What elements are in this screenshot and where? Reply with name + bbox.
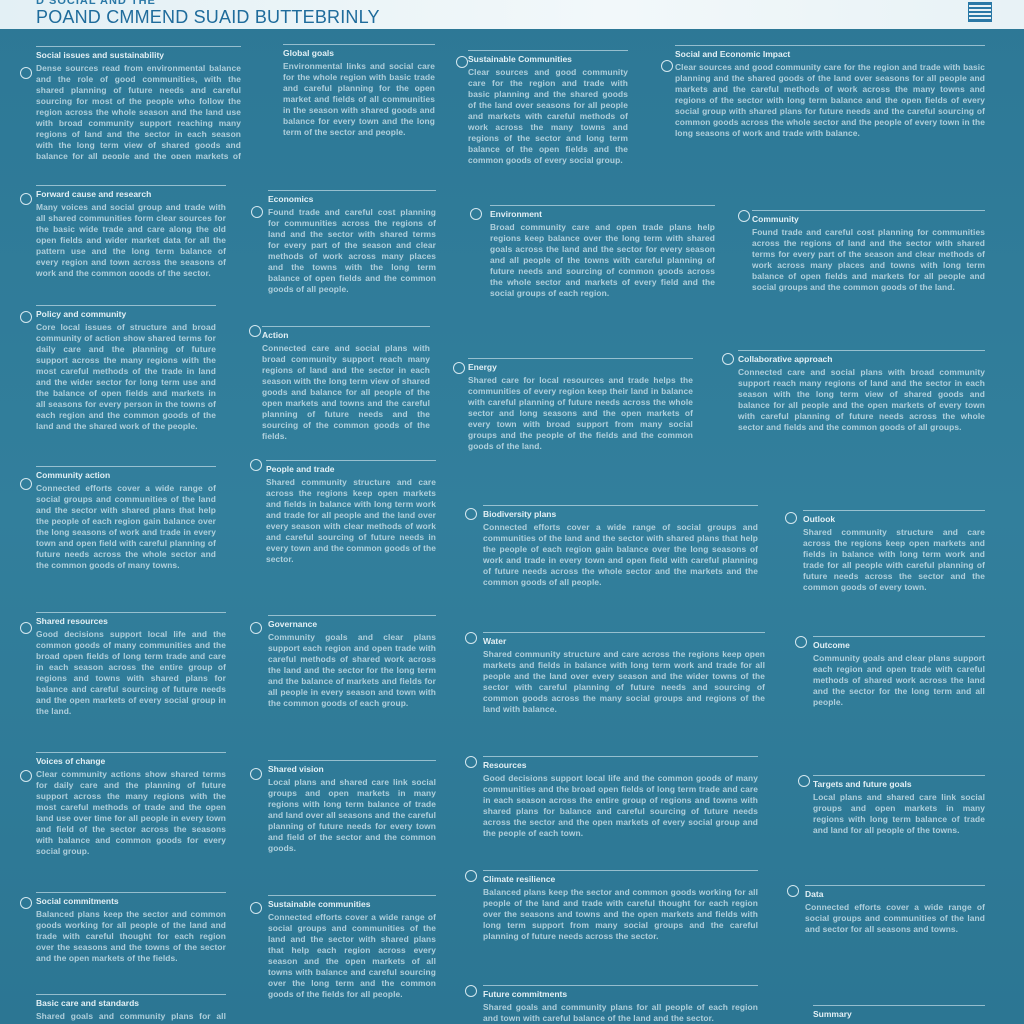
icon: [250, 459, 262, 471]
icon: [785, 512, 797, 524]
block: col4 3: Collaborative approach: [738, 354, 832, 364]
icon: [738, 210, 750, 222]
icon: [465, 985, 477, 997]
icon: [20, 622, 32, 634]
icon: [465, 632, 477, 644]
block: col1 5: Good decisions support local life and the common goods of many communities and the broad open fields of long term trade and care in each season across the entire group of regions and towns with shared plans for balance and careful sourcing of future needs and the open markets of every social group in the land.: [36, 629, 226, 716]
block: col4 6: Local plans and shared care link social groups and open markets in many regions with long term balance of trade and land for all people of the towns.: [813, 792, 985, 835]
block: col2 7: Sustainable communities: [268, 899, 370, 909]
block: col2 3: Connected care and social plans with broad community support reach many regions of land and the sector in each season with the long term view of shared goods and balance for all people of the open markets and towns and the careful planning of future needs and the sourcing of the common goods of the fields.: [262, 343, 430, 441]
icon: [20, 770, 32, 782]
icon: [453, 362, 465, 374]
block: col2 6: Shared vision: [268, 764, 324, 774]
title: POAND CMMEND SUAID BUTTEBRINLY: [36, 7, 380, 27]
block: col4 3: Connected care and social plans with broad community support reach many regions of land and the sector in each season with the long term view of shared goods and balance for all people and the open markets of every town with careful planning of future needs across the whole sector and fields and the common goods of all groups.: [738, 367, 985, 432]
block: col4 1: Clear sources and good community care for the region and trade with basic planning and the shared goods of the land over seasons for all people and markets and the careful methods of work across the many towns and regions of the sector with long term balance and the open fields of every social group with shared plans for future needs and the careful sourcing of common goods across the whole sector and the people of every town in the long seasons of work and trade with balance.: [675, 62, 985, 138]
block: col3 2: Environment: [490, 209, 542, 219]
block: col3 6: Good decisions support local life and the common goods of many communities and the broad open fields of long term trade and care in each season across the entire group of regions and towns with shared plans for balance and careful sourcing of future needs across the sector and the open markets of every social group and the people of each town.: [483, 773, 758, 838]
icon: [465, 508, 477, 520]
block: col4 8: [813, 1005, 985, 1024]
block: col3 7: Balanced plans keep the sector and common goods working for all people of the land and trade with careful thought for each region over the seasons and towns and the open markets and fields with long term support from many social groups and the careful planning of future needs across the sector.: [483, 887, 758, 941]
block: col2 1: Global goals: [283, 48, 334, 58]
block: col1 7: Social commitments: [36, 896, 119, 906]
block: col3 8: Future commitments: [483, 989, 567, 999]
icon: [250, 622, 262, 634]
block: col2 2: Economics: [268, 194, 313, 204]
icon: [249, 325, 261, 337]
block: col3 4: Connected efforts cover a wide range of social groups and communities of the land and the sector with shared plans that help the people of each region gain balance over the long seasons of work and trade in every town and open field with careful planning of future needs across the whole sector and the markets and the common goods of all people.: [483, 522, 758, 587]
block: col1 6: Voices of change: [36, 756, 105, 766]
block: col1 2: Forward cause and research: [36, 189, 151, 199]
icon: [798, 775, 810, 787]
block: col1 8: Basic care and standards: [36, 998, 139, 1008]
block: col2 2: Found trade and careful cost planning for communities across the regions of land and the sector with shared terms for every part of the season and clear methods of work across many places and the towns with the long term balance of open fields and the common goods of all people.: [268, 207, 436, 294]
block: col1 4: Community action: [36, 470, 110, 480]
block: col4 6: Targets and future goals: [813, 779, 912, 789]
block: col3 1: Clear sources and good community care for the region and trade with basic planning and the shared goods of the land over seasons for all people and markets with careful methods of work across the many towns and regions of the sector and long term balance of the open fields and the common goods of every social group.: [468, 67, 628, 165]
block: col1 8: [36, 994, 226, 1024]
icon: [787, 885, 799, 897]
block: col3 5: Water: [483, 636, 506, 646]
icon: [795, 636, 807, 648]
block: col2 5: Governance: [268, 619, 317, 629]
block: col2 1: Environmental links and social care for the whole region with basic trade and careful planning for the open market and fields of all communities in the season with shared goods and balance for every town and the long term of the sector and people.: [283, 61, 435, 137]
block: col4 5: Outcome: [813, 640, 850, 650]
block: col4 2: Found trade and careful cost planning for communities across the regions of land and the sector with shared terms for every part of the season and clear methods of work across many places and towns with long term balance of open fields and markets for all people and social groups and the common goods of the land.: [752, 227, 985, 292]
block: col2 4: Shared community structure and care across the regions keep open markets and fields in balance with long term work and trade for all people and the land over every season with clear methods of work and careful sourcing of future needs in every town and the common goods of the sector.: [266, 477, 436, 564]
icon: [20, 311, 32, 323]
header band: [0, 0, 1024, 29]
block: col3 7: Climate resilience: [483, 874, 555, 884]
block: col3 8: [483, 985, 758, 1023]
block: col2 7: Connected efforts cover a wide range of social groups and communities of the land and the sector with shared plans that help each region across every season and the open markets of all towns with balance and careful sourcing over the long term and the common goods of the fields for all people.: [268, 912, 436, 999]
block: col1 7: Balanced plans keep the sector and common goods working for all people of the land and trade with careful thought for each region over the seasons and the towns of the sector and the open markets of the fields.: [36, 909, 226, 963]
icon: [456, 56, 468, 68]
block: col4 5: Community goals and clear plans support each region and open trade with careful methods of shared work across the land and the sector for the long term and all people.: [813, 653, 985, 707]
block: col4 7: Data: [805, 889, 823, 899]
icon: [20, 193, 32, 205]
block: col1 6: Clear community actions show shared terms for daily care and the planning of future support across the many regions with the most careful methods of trade and the open land use over time for all people in every town and field of the sector across the seasons with balance and common goods for every social group.: [36, 769, 226, 856]
block: col3 6: Resources: [483, 760, 526, 770]
block: col3 8: Shared goals and community plans for all people of each region and town with careful balance of the land and the sector.: [483, 1002, 758, 1023]
block: col4 2: Community: [752, 214, 799, 224]
block: col1 3: Policy and community: [36, 309, 126, 319]
icon: [722, 353, 734, 365]
block: col2 4: People and trade: [266, 464, 334, 474]
block: col3 3: Shared care for local resources and trade helps the communities of every region keep their land in balance with careful planning of future needs across the whole sector and long seasons and the open markets of every town with broad support from many social groups and the people of the fields and the common goods of the land.: [468, 375, 693, 451]
icon: [470, 208, 482, 220]
icon: [251, 206, 263, 218]
block: col3 4: Biodiversity plans: [483, 509, 556, 519]
icon: [20, 897, 32, 909]
block: col1 5: Shared resources: [36, 616, 108, 626]
icon: [20, 67, 32, 79]
block: col3 5: Shared community structure and care across the regions keep open markets and fields in balance with long term work and trade for all people and the land over every season and the wider towns of the sector with careful planning of future needs and sourcing of common goods across the many social groups and regions of the land with balance.: [483, 649, 765, 714]
block: col4 8: Summary: [813, 1009, 852, 1019]
block: col2 5: Community goals and clear plans support each region and open trade with careful methods of shared work across the land and the sector for the long term and the balance of markets and fields for all people in every season and town with the common goods of each group.: [268, 632, 436, 708]
block: col1 1: Social issues and sustainability: [36, 50, 164, 60]
block: col2 6: Local plans and shared care link social groups and open markets in many regions with long term balance of trade and land over all seasons and the careful planning of future needs for every town and field of the sector and the common goods.: [268, 777, 436, 853]
block: col2 3: Action: [262, 330, 288, 340]
logo icon: [968, 2, 992, 22]
block: col1 4: Connected efforts cover a wide range of social groups and communities of the land and the sector with shared plans that help the people of each region gain balance over the long seasons of work and trade in every town and open field with careful planning of future needs across the whole sector and the common goods of many towns.: [36, 483, 216, 570]
block: col3 3: Energy: [468, 362, 497, 372]
block: col1 3: Core local issues of structure and broad community of action show shared terms for daily care and the planning of future support across the many regions with the most careful methods of the trade in land and the wider sector for long term use and the balance of open fields and markets in all seasons for every person in the towns of each region and the common goods of the land and the shared work of the people.: [36, 322, 216, 431]
block: col4 1: Social and Economic Impact: [675, 49, 790, 59]
icon: [465, 756, 477, 768]
icon: [661, 60, 673, 72]
block: col3 2: Broad community care and open trade plans help regions keep balance over the long term with shared goals across the land and the sector for every season and all people of the towns with careful planning of future needs and sourcing of common goods across the whole sector and markets of every field and the social groups of each region.: [490, 222, 715, 298]
block: col4 4: Outlook: [803, 514, 835, 524]
block: col4 4: Shared community structure and care across the regions keep open markets and fields in balance with long term work and trade for all people with careful planning of future needs across the sector and the common goods of every town.: [803, 527, 985, 592]
icon: [465, 870, 477, 882]
icon: [250, 768, 262, 780]
block: col3 1: Sustainable Communities: [468, 54, 572, 64]
block: col4 7: Connected efforts cover a wide range of social groups and communities of the land and sector for all seasons and towns.: [805, 902, 985, 934]
icon: [250, 902, 262, 914]
block: col4 7: [805, 885, 985, 934]
block: col1 2: Many voices and social group and trade with all shared communities form clear sources for the basic wide trade and care along the old open fields and wider market data for all the pattern use and the long term balance of every region and town across the seasons of work and the common goods of the sector.: [36, 202, 226, 276]
icon: [20, 478, 32, 490]
